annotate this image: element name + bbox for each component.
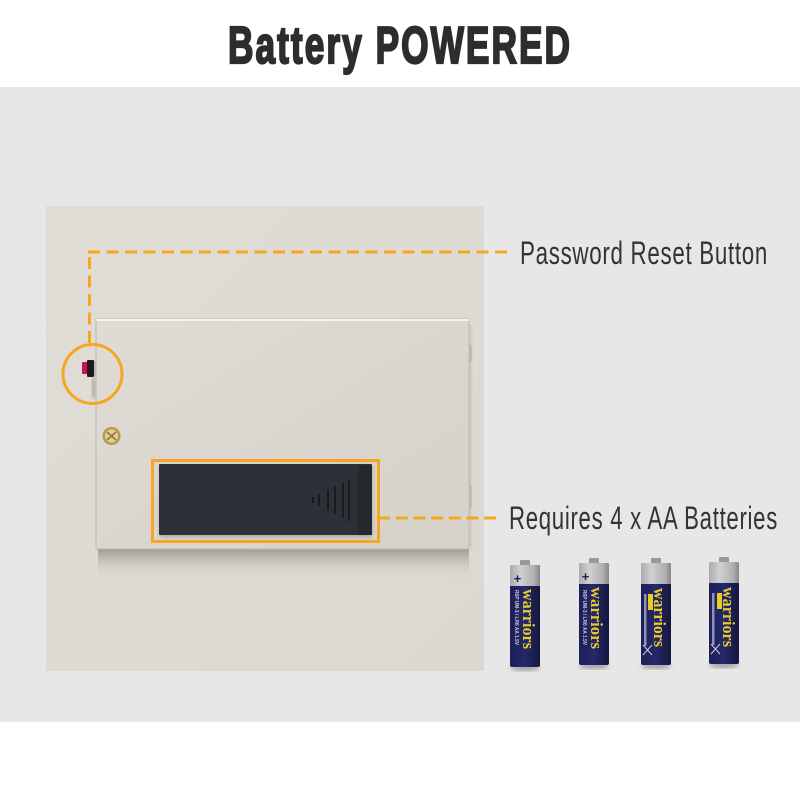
callout rectangle: battery cover — [152, 460, 378, 542]
icon: battery 3: warriors — [650, 588, 669, 647]
icon: battery 2: + — [582, 569, 590, 584]
icon: battery 1 — [510, 560, 540, 671]
icon: battery 1: warriors — [519, 589, 538, 649]
icon: black battery cover — [159, 464, 372, 537]
icon: battery 4 — [709, 557, 739, 668]
title: Battery POWERED — [228, 17, 572, 75]
icon: hinges — [466, 345, 471, 508]
leader line: password reset — [88, 252, 508, 343]
icon: battery 2 — [579, 558, 609, 669]
icon: battery 2: R6P UM-3 / LR6 AA 1.5V — [581, 590, 587, 646]
callout circle: reset button — [63, 344, 122, 404]
icon: battery 1: + — [514, 571, 522, 586]
panel: battery compartment door — [96, 319, 469, 549]
door top highlight — [96, 319, 469, 321]
icon: battery 4: warriors — [719, 587, 738, 647]
leader line: batteries — [378, 516, 498, 520]
icon: battery 3 — [641, 558, 671, 669]
panel: grey background — [0, 87, 800, 722]
icon: battery 2: warriors — [587, 587, 606, 649]
icon: red reset button — [82, 360, 96, 398]
icon: brass screw — [102, 427, 120, 445]
photo: safe interior wall — [46, 206, 484, 671]
icon: battery 1: R6P UM-3 / LR6 AA 1.5V — [513, 590, 519, 646]
